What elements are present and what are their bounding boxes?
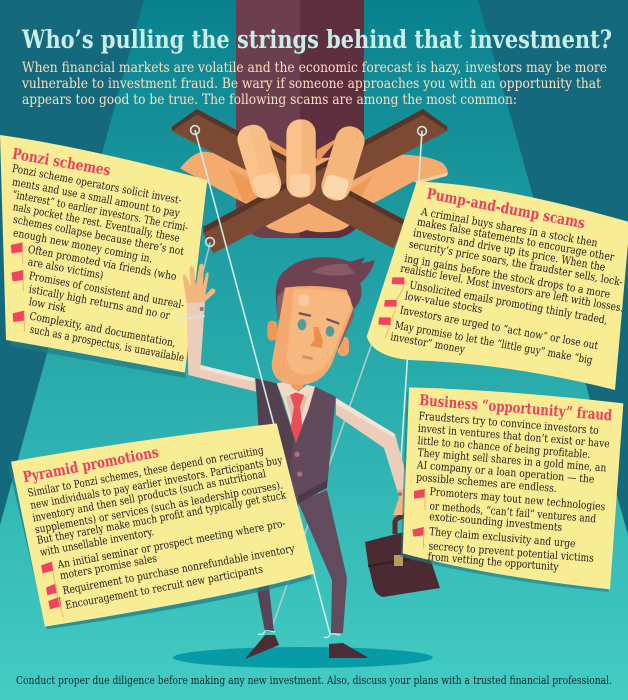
body text: nals pocket the rest. Eventually, these	[12, 200, 181, 245]
body text: schemes collapse because there’s not	[12, 213, 186, 258]
puppeteer hand and control bar	[172, 109, 448, 253]
red flag bullets	[378, 277, 404, 338]
bullet text: Often promoted via friends (who	[27, 243, 178, 283]
body text: Similar to Ponzi schemes, these depend on recruiting	[27, 444, 265, 500]
ears	[267, 321, 277, 341]
finger: right	[318, 123, 368, 204]
bullet text	[27, 243, 186, 364]
body text: ments and use a small amount to pay	[11, 175, 182, 220]
note: Pump-and-dump scams	[367, 182, 628, 390]
bullet text: from vetting the opportunity	[427, 550, 560, 574]
finger: middle	[286, 119, 316, 198]
bullet text: They claim exclusivity and urge	[429, 525, 576, 550]
bullet text	[56, 517, 296, 612]
neck	[289, 381, 305, 390]
intro text	[21, 60, 607, 108]
puppeteer sleeve column	[236, 0, 364, 238]
mouth	[302, 355, 313, 360]
bullet text: Requirement to purchase nonrefundable inventory	[62, 542, 296, 597]
body text: supplements) or services (such as leadership courses).	[34, 478, 284, 536]
raised arm and hand	[172, 264, 256, 392]
body text	[416, 409, 610, 495]
briefcase	[365, 516, 440, 597]
bullet text: istically high returns and no or	[28, 283, 172, 322]
puppet man	[245, 257, 440, 659]
hair back and sideburns	[276, 257, 375, 317]
eyes	[298, 319, 306, 330]
bullet text: such as a prospectus, is unavailable	[29, 323, 185, 364]
bullet text: low risk	[28, 295, 67, 315]
body text: with unsellable inventory.	[39, 525, 155, 559]
bullet text: secrecy to prevent potential victims	[428, 539, 594, 565]
bullet text: moters promise sales	[59, 552, 158, 582]
body text	[27, 444, 287, 559]
strings behind the puppet	[203, 131, 422, 630]
note: Business opportunity fraud	[401, 387, 623, 592]
bullet text: Promises of consistent and unreal-	[28, 269, 186, 312]
bullet text: An initial seminar or prospect meeting where pro-	[56, 517, 287, 571]
forehead highlight	[298, 294, 309, 306]
note: Ponzi schemes	[0, 135, 207, 378]
tie	[290, 392, 304, 443]
heading: Pyramid promotions	[21, 443, 160, 486]
heading: Ponzi schemes	[11, 145, 112, 180]
red flag bullets	[412, 489, 425, 548]
bullet text: Encouragement to recruit new participants	[64, 563, 264, 612]
bullet text: investor” money	[389, 330, 467, 356]
body text: possible schemes are endless.	[416, 471, 557, 495]
right arm	[336, 398, 410, 515]
note: Pyramid promotions	[8, 423, 315, 629]
shoes	[245, 635, 368, 659]
vest	[256, 378, 336, 507]
body text: inventory and then sell products (such as nutritional	[31, 467, 267, 525]
body text: A criminal buys shares in a stock then	[419, 205, 599, 250]
bullet text: or methods, “can’t fail” ventures and	[429, 499, 597, 525]
body text: “interest” to earlier investors. The crimi-	[11, 188, 190, 234]
body text: AI company or a loan operation — the	[416, 458, 595, 486]
body text: little to no chance of being profitable.	[417, 434, 591, 461]
bullet text	[389, 278, 609, 367]
body text: But they rarely make much profit and typically get stuck	[36, 488, 287, 547]
body text: new individuals to pay earlier investors. Participants buy	[29, 453, 284, 512]
upper body and head	[256, 257, 375, 507]
ankle strings	[258, 631, 340, 638]
hair highlight	[312, 264, 355, 276]
heading: Pump-and-dump scams	[425, 185, 586, 232]
body text	[399, 205, 625, 315]
body text	[11, 162, 190, 265]
red flag bullets	[41, 562, 63, 617]
body text: enough new money coming in.	[12, 226, 154, 265]
long string to ankle	[195, 130, 330, 634]
nose	[309, 327, 323, 348]
bullet text: exotic-sounding investments	[429, 510, 563, 534]
bullet text: are also victims)	[27, 255, 105, 282]
bullet text: low-value stocks	[404, 289, 484, 316]
trousers	[257, 490, 347, 633]
shirt collar	[277, 381, 315, 442]
brows	[300, 313, 338, 323]
bullet text	[427, 485, 606, 574]
body text: Ponzi scheme operators solicit invest-	[11, 162, 183, 207]
face	[272, 286, 353, 385]
control bar rings	[191, 126, 426, 246]
intro text: appears too good to be true. The following scams are among the most common:	[22, 92, 517, 108]
bullet text: Complexity, and documentation,	[28, 310, 177, 350]
body text: Fraudsters try to convince investors to	[418, 409, 599, 437]
ground shadow	[173, 647, 433, 668]
red flag bullets	[11, 242, 24, 332]
finger: left	[234, 121, 285, 202]
